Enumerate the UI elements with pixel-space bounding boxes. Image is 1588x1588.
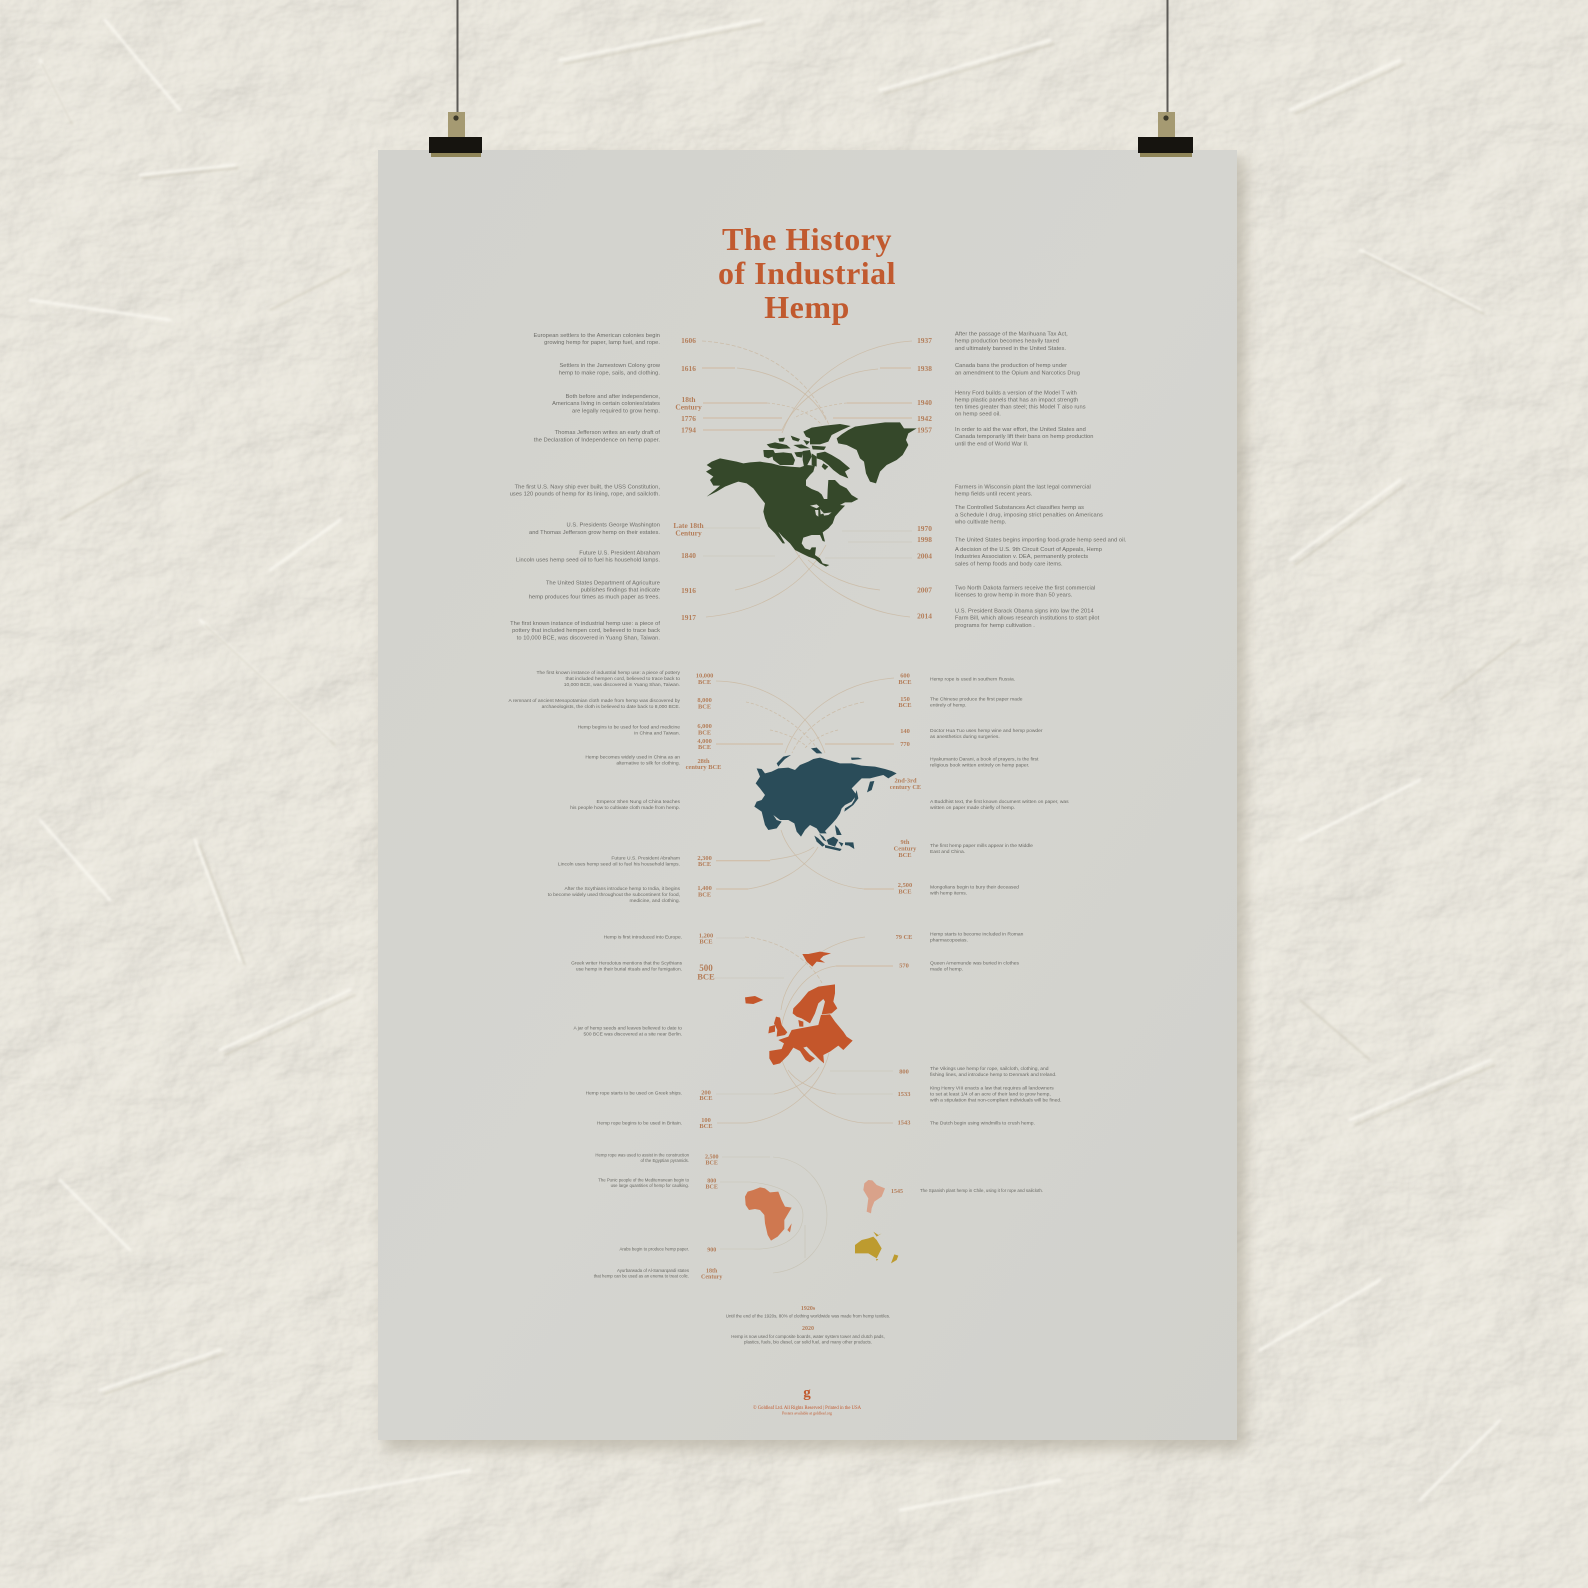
dates: Europe left: 100 <box>701 1117 711 1124</box>
closing notes: 1920s <box>801 1306 816 1312</box>
dates: Asia right: BCE <box>898 679 912 686</box>
text: North America left: pottery that included hempen cord, believed to trace back <box>512 628 660 634</box>
dates: Asia left: 28th <box>697 758 710 765</box>
poster shadow <box>384 158 1246 1450</box>
text: North America right: who cultivate hemp. <box>954 519 1007 525</box>
dates: Europe left: BCE <box>699 938 713 946</box>
text: Europe left: Hemp rope begins to be used in Britain. <box>597 1121 682 1127</box>
title: Hemp <box>764 289 850 325</box>
dates: Asia left: century BCE <box>686 764 721 771</box>
text: North America left: Thomas Jefferson writes an early draft of <box>555 430 660 436</box>
text: Asia right <box>930 676 1069 896</box>
text: Africa: Hemp rope was used to assist in the construction <box>595 1152 690 1158</box>
text: North America right: After the passage of the Marihuana Tax Act, <box>955 332 1068 338</box>
closing notes <box>726 1306 890 1344</box>
title: The History <box>722 221 892 257</box>
panel: Africa, South America and Oceania timeline <box>594 1152 1043 1280</box>
text: Asia right: written on paper made chiefly of hemp. <box>930 805 1015 811</box>
text: Asia right: with hemp items. <box>930 890 967 896</box>
text: Asia left: Lincoln uses hemp seed oil to fuel his household lamps. <box>558 861 680 867</box>
text: North America left: Lincoln uses hemp seed oil to fuel his household lamps. <box>516 558 660 564</box>
text: North America right: hemp plastic panels that has an impact strength <box>955 397 1078 403</box>
text: North America right: on hemp seed oil. <box>955 412 1001 418</box>
text: Asia left: to become widely used throughout the subcontinent for food, <box>548 892 680 898</box>
text: North America left: uses 120 pounds of hemp for its lining, rope, and sailcloth. <box>510 491 660 497</box>
text: Asia left: The first known instance of industrial hemp use: a piece of pottery <box>536 670 681 676</box>
dates: Asia right: BCE <box>898 852 912 859</box>
text: North America left: The United States Department of Agriculture <box>546 580 660 586</box>
text: North America right: The United States begins importing food-grade hemp seed and oil. <box>955 538 1127 544</box>
dates: Europe left: 500 <box>699 963 713 973</box>
text: Asia right: Hemp rope is used in southern Russia. <box>930 676 1015 682</box>
text: Europe left: Hemp is first introduced into Europe. <box>604 935 682 941</box>
dates: Asia right: 600 <box>900 672 910 680</box>
text: Asia left: Hemp becomes widely used in China as an <box>585 754 680 760</box>
closing notes: 2020 <box>802 1326 814 1332</box>
dates: Asia right: BCE <box>898 702 912 709</box>
text: Europe right: The Dutch begin using windmills to crush hemp. <box>930 1120 1035 1126</box>
text: North America left <box>510 333 661 641</box>
connector arcs: North America <box>702 341 912 617</box>
text: Asia right: A Buddhist text, the first known document written on paper, was <box>930 799 1069 805</box>
text: Asia left: in China and Taiwan. <box>634 730 680 736</box>
text: North America left: The first known instance of industrial hemp use: a piece of <box>510 621 660 627</box>
dates: North America left: Century <box>675 528 702 538</box>
text: Africa: The Punic people of the Mediterranean begin to <box>598 1178 690 1182</box>
text: Asia right: Doctor Hua Tuo uses hemp wine and hemp powder <box>930 728 1043 734</box>
text: North America right: sales of hemp foods and body care items. <box>955 561 1063 567</box>
text: North America right: an amendment to the Opium and Narcotics Drug <box>955 370 1080 376</box>
map: North America <box>706 422 917 567</box>
dates: Africa: BCE <box>706 1160 718 1166</box>
text: North America right: until the end of World War II. <box>955 441 1029 447</box>
dates: North America left: Late 18th <box>673 521 704 530</box>
dates: Asia left: BCE <box>698 704 711 710</box>
dates: North America left <box>673 336 704 622</box>
dates: Asia left: 2,300 <box>697 855 712 862</box>
text: North America right: Farm Bill, which allows research institutions to start pilot <box>955 616 1100 622</box>
dates: North America left: 18th <box>682 395 695 404</box>
dates: Europe left <box>697 932 715 1130</box>
text: Europe right: King Henry VIII enacts a law that requires all landowners <box>930 1086 1054 1092</box>
dates: North America left: 1917 <box>681 613 696 622</box>
panel: Europe timeline <box>571 932 1061 1130</box>
dates: North America left: 1840 <box>681 551 696 560</box>
panel: North America timeline <box>510 332 1127 641</box>
dates: Asia right: 770 <box>900 741 910 748</box>
dates: North America left: Century <box>675 402 702 412</box>
text: North America left: The first U.S. Navy ship ever built, the USS Constitution, <box>515 484 660 490</box>
dates: Asia right: 150 <box>900 696 910 703</box>
dates: Asia right <box>890 672 921 896</box>
text: Africa <box>594 1152 690 1278</box>
text: Asia left: that included hempen cord, believed to trace back to <box>566 676 680 682</box>
dates: Asia left: BCE <box>698 744 711 751</box>
dates: Europe right: 1543 <box>898 1120 910 1127</box>
closing notes: Hemp is now used for composite boards, water system tower and clutch pads, <box>731 1334 885 1339</box>
dates: Asia right: BCE <box>898 888 912 896</box>
dates: Africa <box>701 1154 722 1280</box>
text: North America right: a Schedule I drug, imposing strict penalties on Americans <box>955 512 1103 518</box>
dates: Asia right: 140 <box>900 728 910 735</box>
binder clip right <box>1138 0 1193 157</box>
connector arcs: Asia <box>716 678 894 889</box>
text: Europe left: use hemp in their burial rituals and for fumigation. <box>576 966 682 972</box>
text: Europe right: pharmacopoeias. <box>930 937 968 943</box>
date: South America: 1545 <box>891 1189 903 1195</box>
dates: Africa: 2,500 <box>705 1154 718 1160</box>
dates: Asia left: 10,000 <box>696 672 713 680</box>
dates: Europe right: 800 <box>899 1068 909 1076</box>
text: North America left: are legally required to grow hemp. <box>572 408 660 414</box>
dates: Asia right: Century <box>894 846 917 852</box>
dates: Europe left: BCE <box>699 1095 713 1102</box>
title <box>718 221 896 325</box>
poster sheet <box>378 150 1237 1440</box>
text: North America left: European settlers to the American colonies begin <box>534 333 660 339</box>
text: North America right: Farmers in Wisconsin plant the last legal commercial <box>955 484 1091 490</box>
dates: Asia left: 8,000 <box>697 697 712 704</box>
dates: Europe left: BCE <box>697 972 715 982</box>
map: Oceania <box>855 1232 898 1263</box>
dates: Africa: 800 <box>707 1178 716 1184</box>
dates: Europe left: BCE <box>699 1123 713 1130</box>
text: Asia right: The Chinese produce the first paper made <box>930 696 1023 702</box>
text: North America right <box>954 332 1127 629</box>
dates: Asia left: BCE <box>698 861 711 868</box>
text: North America left: Americans living in certain colonies/states <box>552 401 660 407</box>
dates: Europe right: 570 <box>899 962 909 970</box>
panel: Asia timeline <box>508 670 1069 904</box>
dates: North America right: 2007 <box>917 586 932 594</box>
dates: Africa: Century <box>701 1274 722 1280</box>
connector arcs: Europe <box>715 937 893 1123</box>
text: North America left: Settlers in the Jamestown Colony grow <box>559 363 661 369</box>
text: Europe right: with a stipulation that non-compliant individuals will be fined. <box>930 1097 1061 1103</box>
dates: North America right: 2004 <box>917 552 932 560</box>
map: Asia <box>754 748 897 851</box>
text: North America left: Both before and after independence, <box>566 394 660 400</box>
text: North America left: and Thomas Jefferson grow hemp on their estates. <box>529 530 660 536</box>
dates: North America right: 2014 <box>917 612 932 620</box>
text: Europe right: made of hemp. <box>930 966 963 972</box>
text: Asia left: A remnant of ancient Mesopotamian cloth made from hemp was discovered by <box>508 698 681 704</box>
dates: North America right: 1970 <box>917 524 932 533</box>
text: Africa: Arabs begin to produce hemp paper. <box>619 1246 689 1252</box>
text: Asia right: East and China. <box>930 849 965 855</box>
closing notes: plastics, fuels, bio diesel, car solid fuel, and many other products. <box>744 1340 872 1344</box>
dates: Europe right: 79 CE <box>896 934 912 941</box>
text: Europe right: fishing lines, and introduce hemp to Denmark and Ireland. <box>930 1072 1057 1078</box>
dates: Asia left: 6,000 <box>697 723 712 730</box>
dates: North America right: 1957 <box>917 426 932 434</box>
footer logo and credits <box>753 1385 862 1416</box>
text: North America left: the Declaration of Independence on hemp paper. <box>534 437 660 443</box>
text: Europe right: Queen Arnemunde was buried in clothes <box>930 960 1019 966</box>
text: Europe right: The Vikings use hemp for rope, sailcloth, clothing, and <box>930 1066 1049 1072</box>
binder clip left <box>429 0 482 157</box>
text: North America left: publishes findings that indicate <box>581 587 660 593</box>
text: North America right: programs for hemp cultivation . <box>955 623 1035 629</box>
closing notes: Until the end of the 1920s, 80% of clothing worldwide was made from hemp textiles. <box>726 1314 890 1318</box>
dates: Asia left: 4,000 <box>697 738 712 745</box>
text: North America left: growing hemp for paper, lamp fuel, and rope. <box>544 340 660 346</box>
text: North America right: Two North Dakota farmers receive the first commercial <box>955 585 1095 591</box>
dates: North America left: 1616 <box>681 364 696 373</box>
text: Asia right: Hyakumanto Darani, a book of prayers, is the first <box>930 757 1039 763</box>
text: Europe left: Greek writer Herodotus mentions that the Scythians <box>571 961 683 967</box>
dates: North America right: 1942 <box>917 414 932 423</box>
dates: Asia right: 2,500 <box>898 882 912 889</box>
text: Africa: of the Egyptian pyramids. <box>640 1158 689 1163</box>
dates: Asia right: 2nd-3rd <box>894 778 917 784</box>
text: Asia left: Hemp begins to be used for food and medicine <box>578 724 680 730</box>
dates: North America right: 1938 <box>917 364 932 373</box>
title: of Industrial <box>718 255 896 291</box>
text: Europe left <box>571 935 683 1127</box>
dates: Asia left: 1,400 <box>697 885 712 892</box>
footer logo and credits: © Goldleaf Ltd. All Rights Reserved | Printed in the USA <box>753 1405 862 1411</box>
dates: Asia left: BCE <box>698 679 711 686</box>
text: North America right: Canada bans the production of hemp under <box>955 363 1067 369</box>
text: North America right: ten times greater than steel; this Model T also runs <box>955 405 1086 411</box>
dates: North America left: 1776 <box>681 414 696 423</box>
dates: North America left: 1606 <box>681 336 696 345</box>
dates: North America right: 1937 <box>917 336 932 345</box>
text: Asia left: alternative to silk for clothing. <box>616 760 680 766</box>
text: Asia right: Mongolians begin to bury their deceased <box>930 884 1019 890</box>
text: Europe left: 500 BCE was discovered at a site near Berlin. <box>583 1031 682 1037</box>
text: Europe right: to set at least 1/4 of an acre of their land to grow hemp, <box>930 1091 1051 1097</box>
text: North America right: licenses to grow hemp in more than 50 years. <box>955 592 1073 598</box>
dates: Asia right: 9th <box>901 839 910 846</box>
dates: North America left: 1794 <box>681 426 696 434</box>
text: Asia left: his people how to cultivate cloth made from hemp. <box>570 805 680 811</box>
text: Asia left: 10,000 BCE, was discovered in Yuang Shan, Taiwan. <box>564 682 680 688</box>
text: Europe left: A jar of hemp seeds and leaves believed to date to <box>573 1026 682 1032</box>
dates: Asia right: century CE <box>890 784 921 791</box>
text: North America left: U.S. Presidents George Washington <box>567 523 660 529</box>
text: Asia right: entirely of hemp. <box>930 702 967 708</box>
text: North America right: A decision of the U.S. 9th Circuit Court of Appeals, Hemp <box>955 547 1102 553</box>
text: North America right: Industries Association v. DEA, permanently protects <box>955 554 1088 560</box>
connector arcs: Africa <box>720 1157 827 1273</box>
dates: Europe right <box>896 934 912 1127</box>
footer logo and credits: g <box>803 1385 811 1401</box>
dates: North America right: 1998 <box>917 535 932 544</box>
dates: Europe right: 1533 <box>898 1091 910 1098</box>
dates: Asia left: BCE <box>698 892 711 898</box>
text: North America left: Future U.S. President Abraham <box>579 550 660 556</box>
text: Asia right: religious book written entirely on hemp paper. <box>930 763 1029 769</box>
map: South America <box>863 1180 885 1213</box>
text: Europe right: Hemp starts to become included in Roman <box>930 932 1024 938</box>
text: North America left: hemp produces four times as much paper as trees. <box>529 595 660 601</box>
text: Asia left <box>508 670 681 904</box>
text: Asia right: as anesthetics during surgeries. <box>930 734 1000 740</box>
text: South America: The Spanish plant hemp in Chile, using it for rope and sailcloth. <box>920 1188 1043 1193</box>
text: Asia left: archaeologists, the cloth is believed to date back to 8,000 BCE. <box>542 704 680 710</box>
text: North America left: to 10,000 BCE, was discovered in Yuang Shan, Taiwan. <box>517 635 660 641</box>
text: Africa: that hemp can be used as an enema to treat colic. <box>594 1274 689 1278</box>
dates: Asia left <box>686 672 721 898</box>
dates: North America right: 1940 <box>917 398 932 407</box>
text: Europe left: Hemp rope starts to be used on Greek ships. <box>586 1091 682 1097</box>
text: North America right: The Controlled Substances Act classifies hemp as <box>955 505 1084 511</box>
text: Africa: Ayurbarwada of Al-Samarqandi states <box>617 1268 689 1273</box>
text: Asia left: medicine, and clothing. <box>629 898 680 904</box>
text: Asia right: The first hemp paper mills appear in the Middle <box>930 843 1033 849</box>
dates: Europe left: 1,200 <box>699 932 713 940</box>
text: North America right: In order to aid the war effort, the United States and <box>955 427 1086 433</box>
footer logo and credits: Posters available at goldleaf.org <box>782 1412 832 1416</box>
text: North America right: Canada temporarily lift their bans on hemp production <box>955 434 1094 440</box>
text: Africa: use large quantities of hemp for caulking. <box>611 1183 689 1188</box>
map: Africa <box>745 1187 792 1241</box>
text: Europe right <box>930 932 1061 1126</box>
text: North America right: U.S. President Barack Obama signs into law the 2014 <box>955 608 1094 614</box>
map: Europe <box>745 952 853 1065</box>
text: North America right: hemp production becomes heavily taxed <box>955 339 1059 345</box>
text: North America right: hemp fields until recent years. <box>955 491 1033 497</box>
text: North America left: hemp to make rope, sails, and clothing. <box>559 370 660 376</box>
dates: Africa: 900 <box>707 1248 716 1254</box>
text: North America right: and ultimately banned in the United States. <box>955 346 1066 352</box>
text: Asia left: After the Scythians introduce hemp to India, it begins <box>564 886 681 892</box>
dates: Asia left: BCE <box>698 730 711 736</box>
text: Asia left: Future U.S. President Abraham <box>611 855 680 861</box>
text: North America right: Henry Ford builds a version of the Model T with <box>955 390 1077 396</box>
dates: Africa: BCE <box>706 1184 718 1190</box>
dates: Europe left: 200 <box>701 1090 711 1096</box>
dates: North America right <box>917 336 932 620</box>
dates: Africa: 18th <box>706 1268 718 1274</box>
dates: North America left: 1916 <box>681 586 696 595</box>
text: Asia left: Emperor Shen Nung of China teaches <box>597 799 681 805</box>
